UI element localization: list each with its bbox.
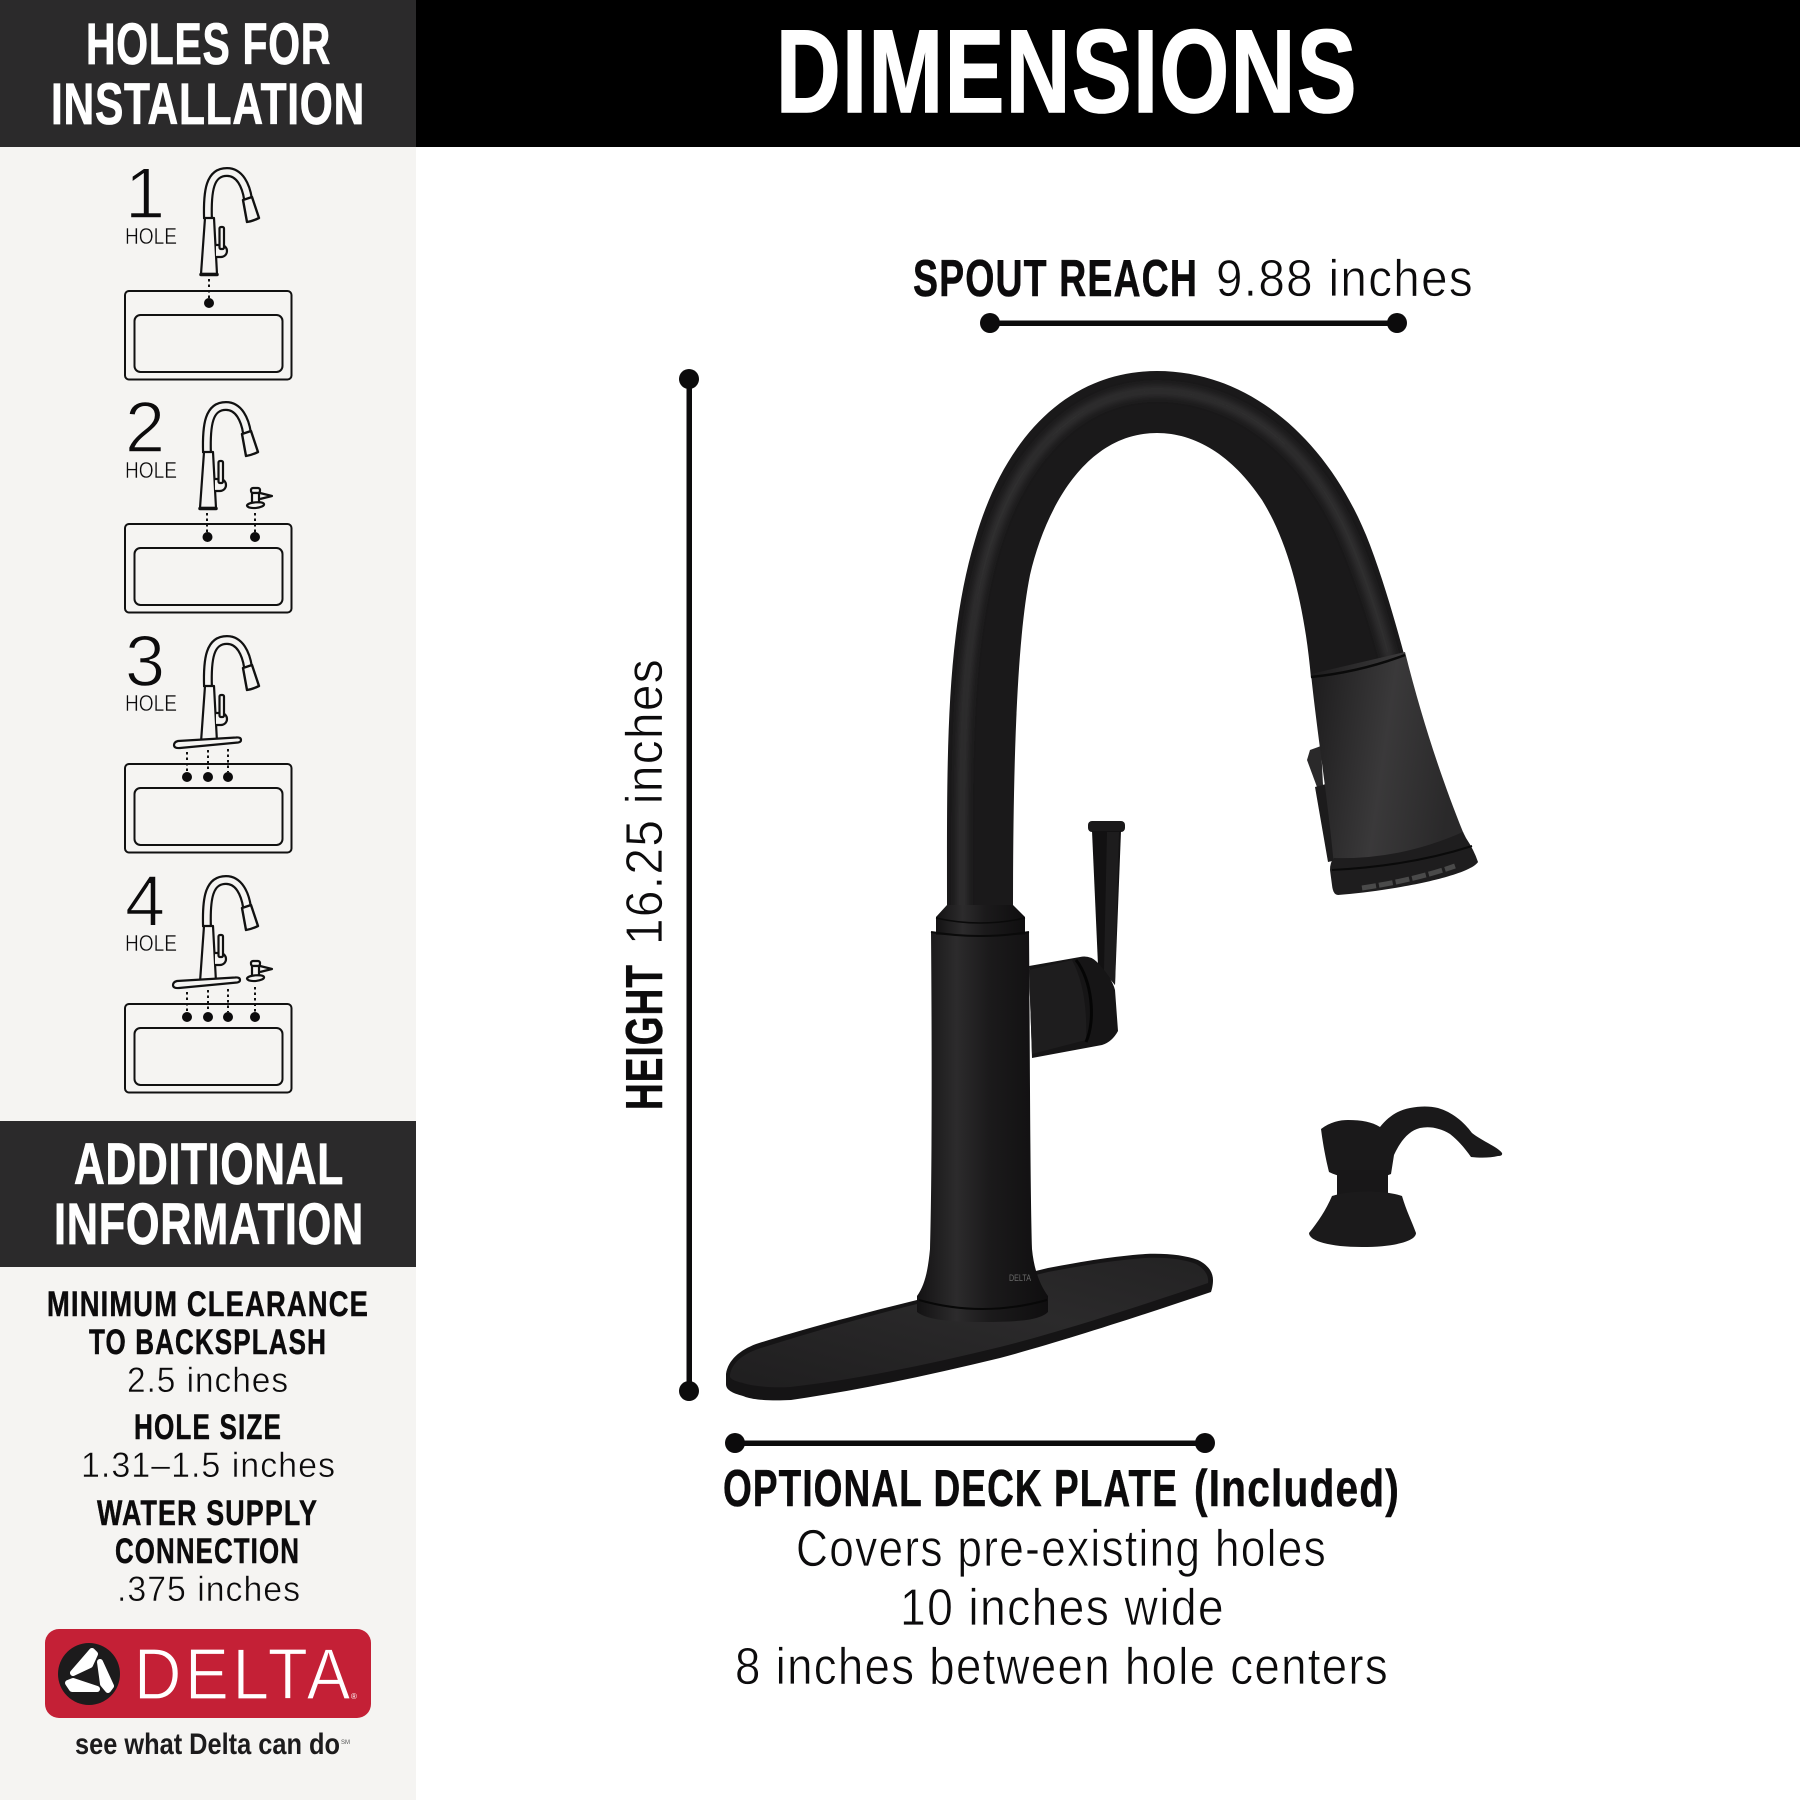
diagram: 4 hole: 4 (125, 862, 165, 942)
text block: minimum clearance (47, 1285, 369, 1400)
deck plate (726, 1254, 1213, 1400)
heading: additional information: ADDITIONAL (74, 1132, 344, 1197)
diagram: 3 hole: HOLE (125, 690, 177, 716)
logo: Delta: DELTA (134, 1635, 354, 1715)
soap dispenser (1309, 1106, 1502, 1247)
logo: Delta: ® (351, 1692, 357, 1701)
dimension bar: height (679, 369, 699, 1401)
faucet (726, 371, 1478, 1400)
logo: Delta (45, 1629, 371, 1718)
diagram: 2 hole: 2 (125, 388, 165, 468)
tagline: see what Delta can do (75, 1728, 340, 1761)
text block: optional deck plate: (Included) (1194, 1460, 1400, 1518)
diagram: 2 hole (125, 388, 292, 612)
diagram: 4 hole (125, 862, 292, 1092)
text block: hole size: 1.31–1.5 inches (81, 1446, 336, 1485)
text block: optional deck plate: Covers pre-existing holes (796, 1520, 1327, 1578)
diagram: 3 hole: 3 (125, 622, 165, 702)
tagline: SM (341, 1740, 350, 1746)
title band: dimensions: DIMENSIONS (776, 6, 1358, 138)
heading: additional information (0, 1121, 416, 1267)
label: spout reach: SPOUT REACH (913, 250, 1198, 308)
diagram: 1 hole: HOLE (125, 223, 177, 249)
label: height: 16.25 inches (616, 658, 674, 945)
text block: water supply connection: CONNECTION (115, 1532, 300, 1571)
spray head (1307, 652, 1478, 895)
dimension bar: deck plate (725, 1433, 1215, 1453)
diagram: 2 hole: HOLE (125, 457, 177, 483)
panel: left sidebar (0, 0, 416, 1800)
label: spout reach: 9.88 inches (1216, 250, 1474, 308)
text block: optional deck plate: 8 inches between hole centers (735, 1638, 1389, 1696)
label: height: HEIGHT (616, 964, 674, 1110)
heading: additional information: INFORMATION (54, 1192, 364, 1257)
text block: optional deck plate (723, 1460, 1400, 1696)
heading: holes for installation: INSTALLATION (51, 72, 365, 137)
diagram: 4 hole: HOLE (125, 930, 177, 956)
spout arch (947, 371, 1404, 912)
text block: water supply connection (97, 1494, 318, 1609)
text block: hole size (81, 1408, 336, 1485)
label: height (616, 658, 674, 1110)
heading: holes for installation (0, 0, 416, 147)
text block: optional deck plate: 10 inches wide (900, 1579, 1225, 1637)
text block: hole size: HOLE SIZE (134, 1408, 282, 1447)
diagram: 1 hole (125, 154, 292, 380)
heading: holes for installation: HOLES FOR (86, 12, 331, 77)
icon: Delta triangle (58, 1643, 120, 1705)
faucet body (917, 905, 1048, 1322)
text block: minimum clearance: MINIMUM CLEARANCE (47, 1285, 369, 1324)
body logo: DELTA (1009, 1273, 1031, 1283)
text block: minimum clearance: 2.5 inches (127, 1361, 289, 1400)
diagram: 1 hole: 1 (125, 154, 165, 234)
text block: minimum clearance: TO BACKSPLASH (89, 1323, 327, 1362)
dimension bar: spout reach (980, 313, 1407, 333)
text block: optional deck plate: OPTIONAL DECK PLATE (723, 1460, 1178, 1518)
title band: dimensions (416, 0, 1800, 147)
text block: water supply connection: .375 inches (117, 1570, 301, 1609)
handle hub (1029, 957, 1118, 1058)
diagram: 3 hole (125, 622, 292, 852)
text block: water supply connection: WATER SUPPLY (97, 1494, 318, 1533)
lever (1088, 821, 1125, 985)
